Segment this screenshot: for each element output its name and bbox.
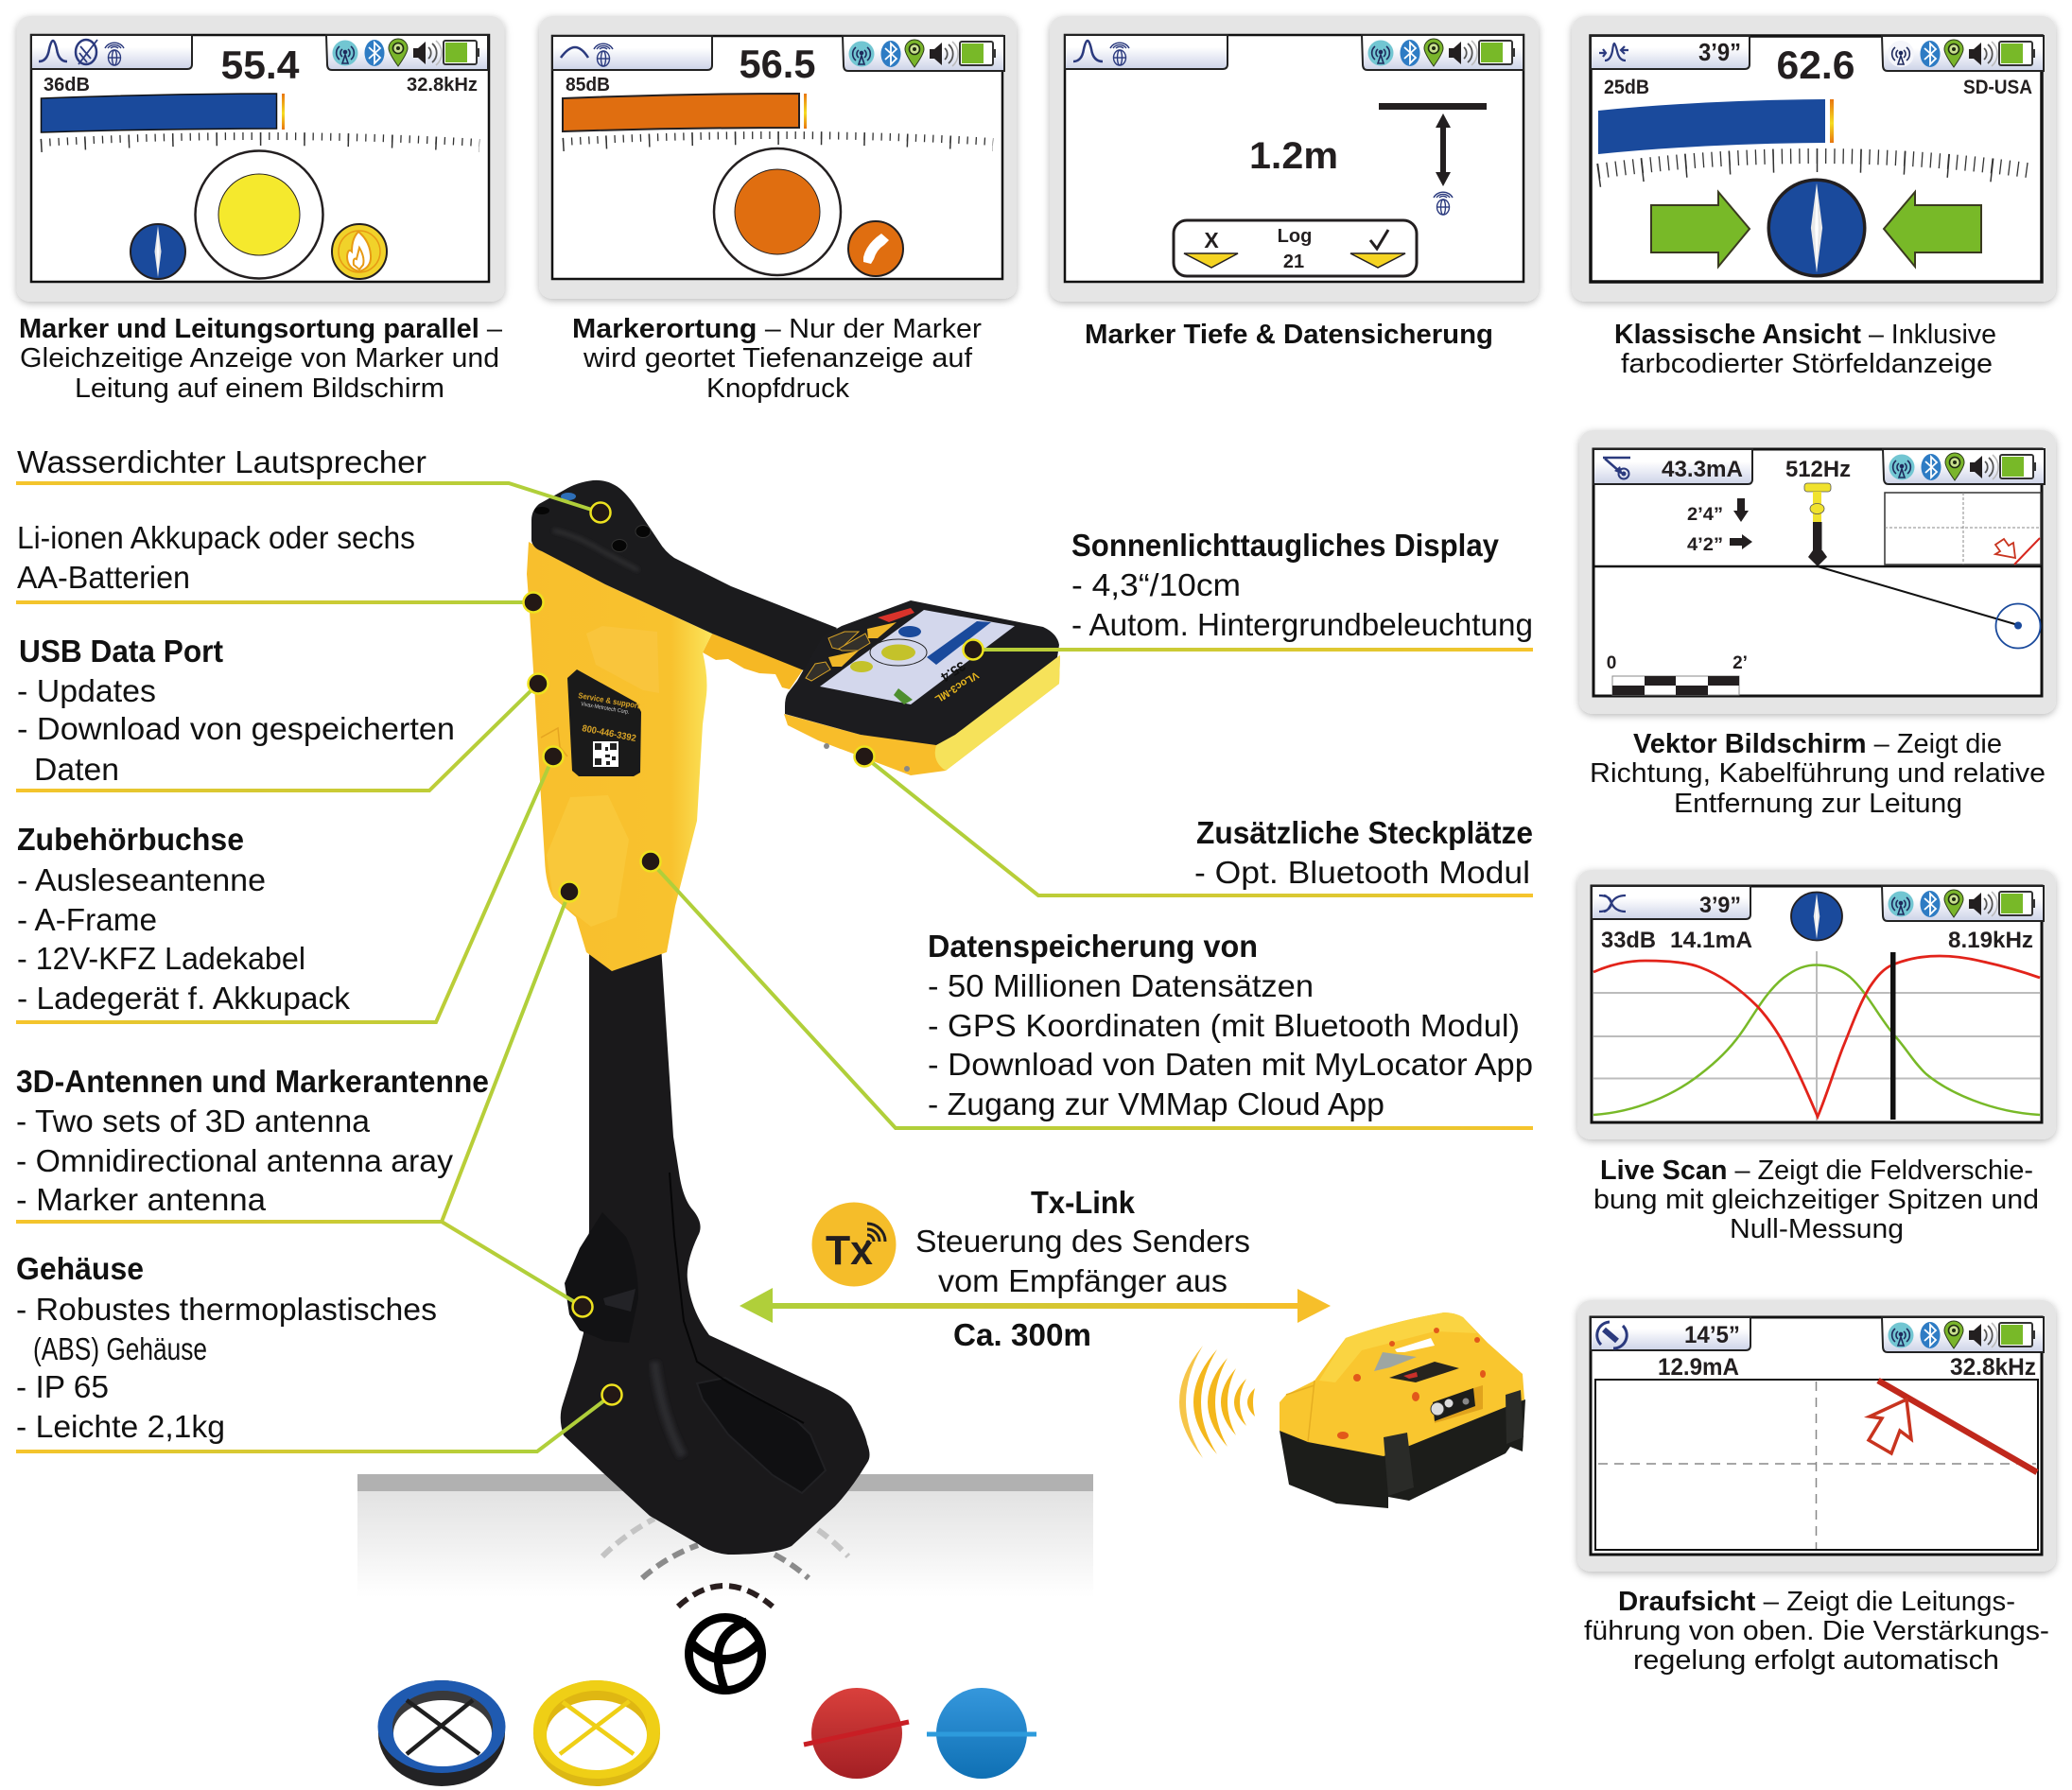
marker: yellow ring — [533, 1680, 660, 1786]
icon: Tx badge: Tx — [826, 1227, 874, 1274]
text: Zubehörbuchse: - Ladegerät f. Akkupack — [17, 981, 350, 1016]
frequency: 8.19kHz — [1948, 928, 2033, 953]
text: Display: Sonnenlichttaugliches Display — [1071, 528, 1500, 563]
text: Steckplätze: Zusätzliche Steckplätze — [1196, 815, 1533, 850]
depth value: 1.2m — [1249, 135, 1338, 177]
caption: Live Scan: Live Scan – Zeigt die Feldverschie- — [1600, 1156, 2033, 1186]
peak marker — [804, 94, 807, 129]
transmitter device — [1280, 1312, 1525, 1508]
status icons — [326, 35, 488, 70]
caption: Marker und Leitungsortung parallel: Gleichzeitige Anzeige von Marker und — [20, 343, 499, 374]
ground line — [1593, 565, 2042, 567]
text: 3D-Antennen: - Marker antenna — [16, 1182, 267, 1217]
service sticker: 800-446-3392 — [581, 723, 637, 744]
caption: Klassische Ansicht: Klassische Ansicht – Inklusive — [1614, 320, 1996, 350]
marker: blue ring — [378, 1680, 505, 1786]
text: Akkupack: Li-ionen Akkupack oder sechs — [17, 520, 415, 555]
text: Datenspeicherung — [928, 929, 1533, 1121]
signal bar — [1598, 99, 1825, 154]
text: 3D-Antennen — [16, 1064, 489, 1217]
text: Display — [1071, 528, 1533, 642]
text: 3D-Antennen: - Two sets of 3D antenna — [16, 1104, 371, 1138]
vector to cable — [1818, 566, 2041, 649]
text: Gehäuse: - Leichte 2,1kg — [16, 1409, 225, 1444]
caption: Markerortung: wird geortet Tiefenanzeige auf — [583, 343, 973, 374]
status icons — [843, 36, 1004, 71]
status icons — [1882, 886, 2044, 921]
housing dots — [1337, 1328, 1486, 1439]
gain and current — [1601, 928, 1752, 953]
text: Datenspeicherung: - Download von Daten mit MyLocator App — [928, 1047, 1533, 1082]
panel: marker and line locate screen — [17, 16, 505, 302]
caption: Marker Tiefe und Datensicherung: Marker Tiefe & Datensicherung — [1085, 320, 1493, 350]
text: Datenspeicherung: Datenspeicherung von — [928, 929, 1258, 964]
status icons — [1362, 35, 1524, 70]
locator icon — [1804, 483, 1831, 566]
distance scale: 0 — [1607, 653, 1616, 673]
display head black top — [785, 600, 1059, 745]
yellow body — [527, 542, 712, 971]
handle opening — [1395, 1338, 1435, 1352]
brand label: VLoc3-ML — [932, 669, 981, 704]
signal value: 62.6 — [1776, 43, 1855, 87]
mode icons — [39, 40, 97, 64]
text: 3D-Antennen: 3D-Antennen und Markerantenne — [16, 1064, 489, 1099]
text: Akkupack: AA-Batterien — [17, 560, 190, 595]
accessory port screws — [824, 743, 910, 772]
caption: Live Scan: Null-Messung — [1730, 1214, 1904, 1244]
lower black case — [1280, 1399, 1525, 1508]
text: Akkupack — [17, 520, 415, 595]
text: Display: - Autom. Hintergrundbeleuchtung — [1071, 607, 1533, 642]
latches — [1384, 1390, 1524, 1496]
knob facet — [603, 1289, 636, 1312]
frequency mode: SD-USA — [1963, 77, 2032, 98]
screen — [31, 35, 489, 282]
peak marker — [282, 94, 285, 130]
control panel — [1389, 1362, 1459, 1382]
mode icons — [1073, 41, 1129, 65]
marker target circle — [714, 148, 841, 275]
side knob — [565, 1212, 638, 1343]
text: Zubehörbuchse: Zubehörbuchse — [17, 822, 244, 857]
service sticker — [567, 669, 641, 776]
gain and current: 14.1mA — [1670, 928, 1752, 953]
depth and offset values — [1687, 498, 1752, 555]
display head yellow side — [935, 655, 1060, 771]
mode icon — [1599, 43, 1628, 61]
arrow: Tx link range — [740, 1288, 1331, 1323]
gain: 85dB — [566, 75, 610, 96]
caption: Markerortung — [572, 314, 982, 404]
marker target circle — [195, 151, 323, 278]
depth and offset values: 4’2” — [1687, 535, 1723, 555]
caption: Live Scan: bung mit gleichzeitiger Spitzen und — [1593, 1185, 2039, 1215]
callout dots — [524, 503, 984, 1405]
shaft seam — [670, 1173, 804, 1423]
screen — [1591, 36, 2042, 282]
mode icons — [561, 43, 613, 66]
scale — [1598, 156, 2034, 176]
ground surface — [357, 1474, 1093, 1597]
gain: 36dB — [44, 75, 90, 96]
inset plan view — [1885, 493, 2041, 565]
screen — [1593, 449, 2042, 696]
text: USB Data Port — [17, 634, 455, 787]
mode icon — [1597, 1322, 1627, 1348]
depth and offset values: 2’4” — [1687, 505, 1723, 525]
icon: marker symbol globe — [688, 1617, 762, 1691]
frequency: 32.8kHz — [1950, 1354, 2036, 1381]
marker: blue ball — [927, 1688, 1036, 1779]
peak marker — [1830, 99, 1834, 143]
mode header box — [552, 36, 712, 70]
display head yellow base — [784, 655, 1060, 775]
caption: Vektor Bildschirm: Vektor Bildschirm – Zeigt die — [1633, 729, 2002, 759]
text: Datenspeicherung: - 50 Millionen Datensätzen — [928, 968, 1314, 1003]
caption: Draufsicht — [1584, 1587, 2049, 1676]
caption: Marker und Leitungsortung parallel: Leitung auf einem Bildschirm — [75, 374, 444, 404]
text: Display: - 4,3“/10cm — [1071, 567, 1241, 602]
caption: Markerortung: Knopfdruck — [706, 374, 850, 404]
text: USB Data Port: - Download von gespeicherten — [17, 711, 455, 746]
mode header box — [1591, 36, 1750, 69]
head corner sheen — [925, 719, 929, 738]
plan view chart — [1595, 1380, 2038, 1550]
handle sheen — [553, 530, 638, 570]
service sticker: Service & support — [578, 690, 641, 710]
signal bar — [563, 94, 799, 131]
port — [1431, 1385, 1483, 1423]
compass — [1791, 892, 1842, 941]
distance scale: 2’ — [1732, 653, 1748, 673]
log box — [1174, 220, 1417, 276]
ground bar — [1379, 103, 1487, 110]
panel: marker locate screen — [539, 16, 1017, 299]
icon: Tx badge — [811, 1203, 897, 1286]
distance scale — [1607, 653, 1748, 695]
text: Gehäuse: Gehäuse — [16, 1251, 144, 1286]
frequency: 512Hz — [1785, 457, 1851, 482]
signal value: 55.4 — [221, 43, 300, 87]
locator device — [527, 480, 1060, 1555]
text: range: Ca. 300m — [953, 1317, 1091, 1352]
caption: Live Scan — [1593, 1156, 2039, 1244]
black handle — [531, 480, 837, 670]
upper body facet — [586, 626, 659, 693]
signal bar — [42, 94, 276, 132]
caption: Markerortung: Markerortung – Nur der Marker — [572, 314, 982, 344]
housing facet edge — [1286, 1381, 1315, 1442]
left guidance arrow — [1651, 192, 1750, 267]
text: Gehäuse: (ABS) Gehäuse — [33, 1331, 207, 1366]
icon: radio waves — [1179, 1346, 1255, 1458]
lower shaft and foot — [561, 946, 870, 1555]
text: Datenspeicherung: - GPS Koordinaten (mit Bluetooth Modul) — [928, 1008, 1520, 1043]
current: 43.3mA — [1662, 457, 1743, 482]
panel: marker depth and logging screen — [1050, 16, 1539, 302]
gain and current: 33dB — [1601, 928, 1656, 953]
screen — [1065, 35, 1524, 282]
panel: plan view screen — [1577, 1300, 2056, 1572]
right guidance arrow — [1884, 192, 1981, 267]
text: USB Data Port: - Updates — [17, 673, 156, 708]
screen — [552, 36, 1002, 279]
foot ridge — [697, 1378, 826, 1493]
yellow handle underside — [703, 634, 804, 689]
log box: Log — [1278, 226, 1312, 247]
marker type icon: telecom — [848, 221, 903, 276]
double arrow — [1436, 113, 1451, 186]
mode header box — [1593, 449, 1752, 484]
service sticker: Vivax-Metrotech Corp. — [581, 702, 630, 716]
screen — [1591, 1317, 2042, 1555]
status icons — [1882, 36, 2044, 71]
yellow top housing — [1280, 1312, 1524, 1456]
text: Gehäuse: - IP 65 — [16, 1369, 109, 1404]
display screen — [820, 610, 1015, 704]
text: Wasserdichter Lautsprecher: Wasserdichter Lautsprecher — [17, 444, 427, 479]
caption: Draufsicht: führung von oben. Die Verstärkungs- — [1584, 1616, 2049, 1646]
scale — [41, 136, 479, 146]
text: 3D-Antennen: - Omnidirectional antenna aray — [16, 1143, 453, 1178]
caption: Klassische Ansicht — [1614, 320, 1996, 379]
gain: 25dB — [1604, 77, 1649, 98]
display patch — [1374, 1352, 1417, 1371]
handle holes and badge — [534, 493, 651, 552]
callout lines left — [16, 483, 612, 1451]
caption: Marker und Leitungsortung parallel: Marker und Leitungsortung parallel – — [19, 314, 503, 344]
mode icon — [1599, 895, 1626, 912]
keypad — [806, 608, 914, 681]
caption: Klassische Ansicht: farbcodierter Störfeldanzeige — [1621, 349, 1993, 379]
depth: 3’9” — [1699, 893, 1741, 918]
accessory door outline — [541, 728, 567, 756]
text: Steckplätze — [1194, 815, 1533, 890]
callout lines right — [651, 650, 1533, 1128]
compass — [131, 224, 185, 279]
text: USB Data Port: Daten — [34, 752, 119, 787]
status icons — [1882, 1317, 2044, 1352]
marker icon — [1434, 192, 1453, 215]
panel: vector screen — [1579, 430, 2056, 714]
log box: 21 — [1283, 252, 1304, 272]
current: 12.9mA — [1658, 1354, 1739, 1381]
mode header box — [31, 35, 192, 69]
text: Steckplätze: - Opt. Bluetooth Modul — [1194, 855, 1530, 890]
status icons — [1883, 449, 2045, 484]
handle top highlight — [1319, 1312, 1477, 1382]
depth: 14’5” — [1684, 1322, 1740, 1348]
compass — [1768, 180, 1865, 276]
depth: 3’9” — [1698, 38, 1741, 66]
mode icon — [1603, 458, 1630, 478]
mode header box — [1592, 886, 1750, 919]
text: Tx-Link: vom Empfänger aus — [938, 1263, 1228, 1298]
foot sheen — [654, 1362, 683, 1456]
text: Zubehörbuchse: - 12V-KFZ Ladekabel — [17, 941, 305, 976]
text: Tx-Link: Steuerung des Senders — [915, 1224, 1250, 1259]
marker type icon: gas — [332, 224, 387, 279]
screen — [1592, 886, 2042, 1122]
panel: classic view screen — [1572, 16, 2056, 302]
caption: Draufsicht: Draufsicht – Zeigt die Leitungs- — [1618, 1587, 2015, 1617]
lower body facet — [547, 795, 629, 927]
mode header box — [1065, 35, 1228, 69]
text: Zubehörbuchse: - A-Frame — [17, 902, 157, 937]
text: Tx-Link: Tx-Link — [1031, 1185, 1136, 1220]
text: Gehäuse — [16, 1251, 437, 1444]
text: Gehäuse: - Robustes thermoplastisches — [16, 1292, 437, 1327]
caption: Vektor Bildschirm: Richtung, Kabelführung und relative — [1590, 758, 2046, 789]
text: Datenspeicherung: - Zugang zur VMMap Cloud App — [928, 1086, 1384, 1121]
mode header box — [1591, 1317, 1750, 1350]
signal value: 56.5 — [740, 42, 815, 86]
panel: live scan screen — [1577, 870, 2056, 1139]
text: Zubehörbuchse: - Ausleseantenne — [17, 862, 266, 897]
log box: X — [1204, 228, 1219, 252]
text: USB Data Port: USB Data Port — [19, 634, 223, 669]
frequency: 32.8kHz — [407, 75, 478, 96]
caption: Vektor Bildschirm — [1590, 729, 2046, 819]
text: Tx-Link — [915, 1185, 1250, 1298]
marker: red ball — [804, 1688, 909, 1779]
caption: Marker und Leitungsortung parallel — [19, 314, 503, 404]
live scan chart — [1593, 951, 2040, 1121]
caption: Vektor Bildschirm: Entfernung zur Leitung — [1674, 789, 1962, 819]
scale — [563, 135, 993, 145]
text: Zubehörbuchse — [17, 822, 350, 1016]
caption: Draufsicht: regelung erfolgt automatisch — [1633, 1645, 1999, 1676]
display screen: 35.4 — [938, 658, 968, 686]
signal arcs below the locator — [602, 1519, 848, 1607]
